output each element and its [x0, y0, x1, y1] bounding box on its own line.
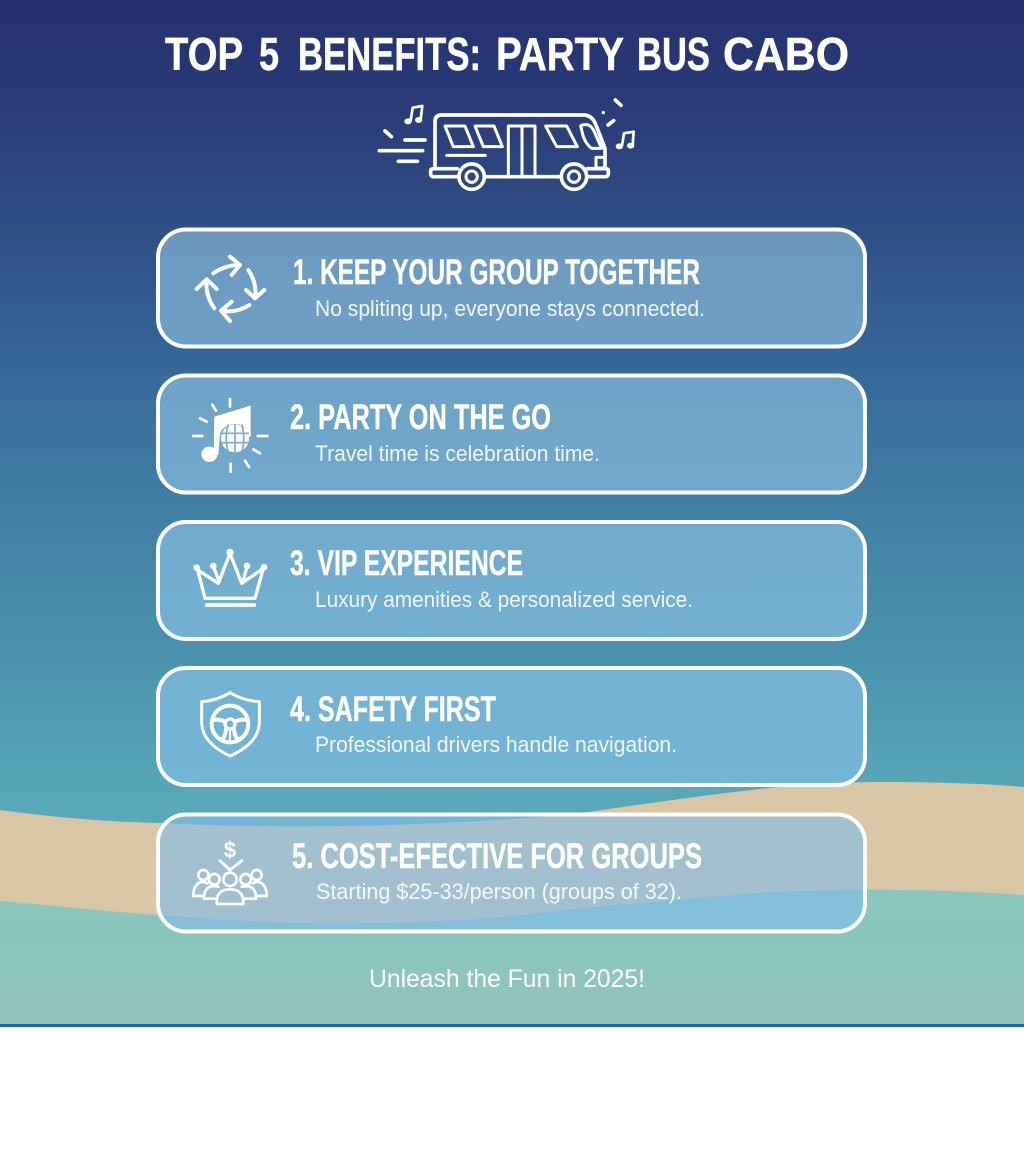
heading 4: 4. SAFETY FIRST [290, 690, 496, 729]
title: TOP [165, 28, 243, 80]
title: 5 [259, 28, 279, 80]
title [165, 28, 849, 80]
heading 2: 2. PARTY ON THE GO [290, 398, 551, 437]
icon: music note with disco globe [193, 399, 267, 472]
panel: safety first [158, 668, 865, 785]
heading 5: 5. COST-EFECTIVE FOR GROUPS [292, 837, 702, 876]
panel: party on the go [158, 376, 865, 492]
icon: right music note [616, 132, 634, 149]
icon: crown [193, 549, 267, 605]
panel: keep your group together [158, 230, 865, 346]
description 1: No spliting up, everyone stays connected. [315, 296, 705, 321]
icon: shield with steering wheel [202, 693, 259, 756]
panel: cost-effective for groups [158, 814, 865, 932]
title: PARTY [496, 28, 624, 80]
icon: circular arrows [197, 257, 264, 321]
icon: people with dollar sign [193, 838, 267, 904]
heading 1: 1. KEEP YOUR GROUP TOGETHER [293, 253, 700, 292]
description 2: Travel time is celebration time. [315, 441, 600, 466]
title: BENEFITS: [298, 28, 481, 80]
description 5: Starting $25-33/person (groups of 32). [316, 879, 682, 904]
description 3: Luxury amenities & personalized service. [315, 587, 693, 612]
bottom border [0, 1024, 1024, 1027]
title: CABO [723, 28, 849, 80]
icon: people with dollar sign: $ [224, 838, 236, 863]
footer tagline: Unleash the Fun in 2025! [369, 965, 645, 993]
panel: vip experience [158, 522, 865, 639]
water wave [0, 890, 1024, 1024]
title: BUS [637, 28, 710, 80]
sand wave [0, 782, 1024, 1024]
icon: party bus with music notes [379, 100, 634, 189]
heading 3: 3. VIP EXPERIENCE [290, 544, 523, 583]
icon: left music note [404, 106, 422, 124]
description 4: Professional drivers handle navigation. [315, 732, 677, 757]
